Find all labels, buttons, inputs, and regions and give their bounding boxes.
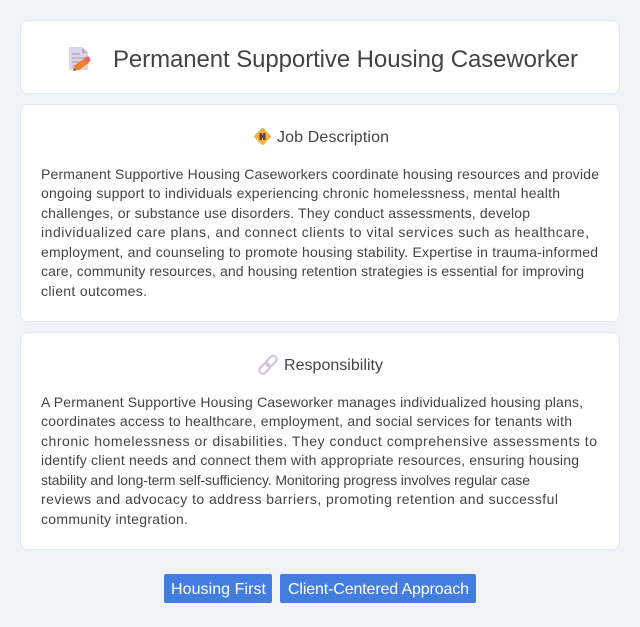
text block: responsibility: community integration.: [41, 511, 188, 527]
icon: document with pencil: [69, 47, 90, 71]
text block: job description: ongoing support to individuals experiencing chronic homelessness, mental health: [41, 185, 560, 201]
text block: responsibility: chronic homelessness or disabilities. They conduct comprehensive assessments to: [41, 433, 597, 449]
text block: job description: care, community resources, and housing retention strategies is essential for improving: [41, 263, 584, 279]
title: Permanent Supportive Housing Caseworker: [113, 46, 578, 73]
panel: job description: [20, 104, 620, 322]
text block: job description: [41, 166, 599, 299]
tag: Client-Centered Approach: Client-Centered Approach: [288, 581, 469, 598]
text block: responsibility: reviews and advocacy to address barriers, promoting retention and successful: [41, 491, 558, 507]
text block: responsibility: stability and long-term self-sufficiency. Monitoring progress involves regular case: [41, 472, 530, 488]
text block: responsibility: A Permanent Supportive Housing Caseworker manages individualized housing plans,: [41, 394, 583, 410]
icon: orange diamond: [253, 127, 272, 146]
text block: job description: individualized care plans, and connect clients to vital services such as healthcare,: [41, 224, 589, 240]
text block: job description: client outcomes.: [41, 283, 147, 299]
text block: responsibility: identify client needs and connect them with appropriate resources, ensuring housing: [41, 452, 579, 468]
panel: title header: [20, 20, 620, 94]
text block: job description: employment, and counseling to promote housing stability. Expertise in trauma-informed: [41, 244, 598, 260]
tag: Housing First: Housing First: [171, 581, 267, 598]
heading: job description: Job Description: [277, 129, 389, 146]
tag: Housing First: [164, 574, 272, 603]
tag: Client-Centered Approach: [280, 574, 476, 603]
heading: responsibility: Responsibility: [284, 357, 383, 374]
text block: responsibility: coordinates access to healthcare, employment, and social services for tenants with: [41, 413, 572, 429]
icon: chain link: [258, 354, 278, 375]
text block: responsibility: [41, 394, 597, 527]
panel: responsibility: [20, 332, 620, 550]
text block: job description: Permanent Supportive Housing Caseworkers coordinate housing resources and provide: [41, 166, 599, 182]
text block: job description: challenges, or substance use disorders. They conduct assessments, develop: [41, 205, 530, 221]
